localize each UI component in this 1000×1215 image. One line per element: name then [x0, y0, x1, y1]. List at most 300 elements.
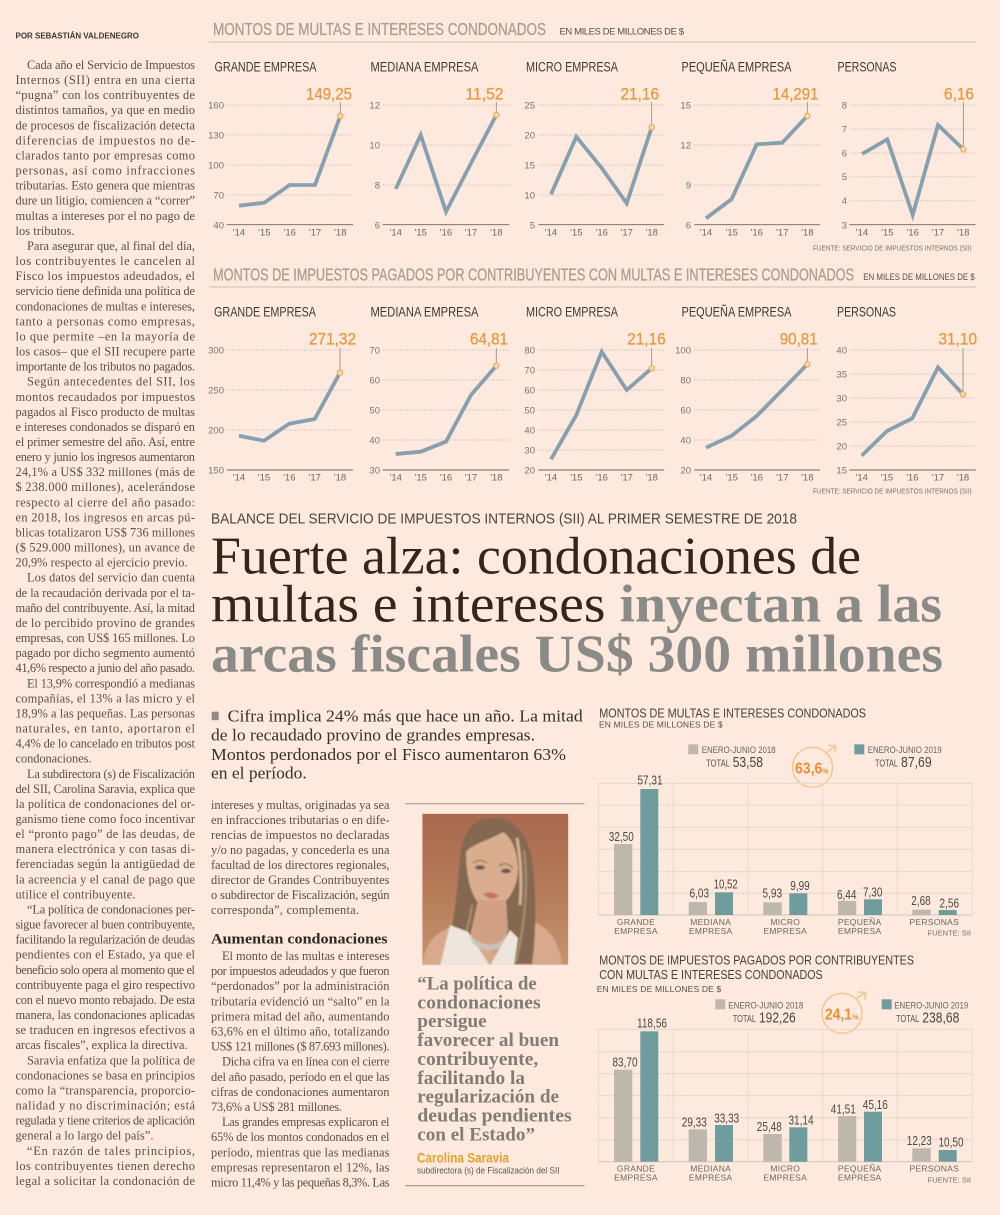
growth badge 24,1%: 24,1: [825, 1006, 852, 1023]
title: [211, 527, 943, 684]
pull quote: favorecer al buen: [417, 1030, 559, 1051]
text block: left article column: diferencias de impuestos no de-: [16, 133, 195, 147]
line chart: multas grande empresa: 40: [213, 220, 224, 232]
line chart: impuestos pequeña empresa: 60: [680, 406, 691, 416]
line chart: multas micro empresa: '16: [596, 228, 608, 238]
pull quote: facilitando la: [417, 1068, 526, 1089]
line chart: multas grande empresa: '16: [284, 228, 296, 238]
group: micro empresa: 25,48: [757, 1120, 782, 1134]
text block: left article column: condonaciones de multas e intereses,: [16, 299, 195, 313]
pull quote: “La política de: [417, 973, 537, 994]
source note: impuestos: FUENTE: SERVICIO DE IMPUESTOS INTERNOS (SII): [813, 486, 972, 495]
line chart: impuestos personas: 25: [836, 418, 847, 428]
group: grande empresa: 83,70: [612, 1055, 638, 1069]
text block: middle column bottom: cifras de condonaciones aumentaron: [211, 1085, 390, 1099]
line chart: multas pequeña empresa: '18: [801, 228, 813, 238]
line chart: impuestos personas: 35: [836, 370, 847, 380]
group: pequeña empresa: PEQUEÑA: [838, 917, 882, 927]
line chart: impuestos micro empresa: '17: [621, 472, 633, 484]
legend 2018: 192,26: [759, 1010, 796, 1026]
text block: middle column bottom: período, mientras que las medianas: [211, 1145, 390, 1159]
line chart: impuestos personas: '18: [957, 472, 969, 484]
group: grande empresa: 57,31: [638, 773, 663, 787]
text block: left article column: condonaciones.: [16, 752, 92, 766]
line chart: multas mediana empresa: [369, 60, 509, 238]
text block: left article column: importante de los tributos no pagados.: [16, 360, 195, 374]
line chart: impuestos grande empresa: 250: [208, 386, 224, 396]
quote attribution: subdirectora (s) de Fiscalización del SII: [417, 1165, 560, 1176]
text block: left article column: “En razón de tales principios,: [27, 1144, 195, 1158]
line chart: multas micro empresa: 10: [524, 190, 535, 202]
group: pequeña empresa: [837, 886, 882, 936]
text block: left article column: [16, 58, 196, 1188]
line chart: impuestos micro empresa: 80: [524, 346, 535, 356]
group: micro empresa: [757, 1113, 814, 1183]
group: personas: PERSONAS: [909, 1164, 959, 1174]
text block: left article column: “La política de condonaciones per-: [27, 902, 195, 916]
legend 2018: ENERO-JUNIO 2018: [702, 745, 776, 756]
group: mediana empresa: EMPRESA: [689, 1173, 733, 1183]
text block: left article column: manera, las condonaciones aplicadas: [16, 1008, 195, 1022]
text block: left article column: enero y junio los ingresos aumentaron: [16, 450, 195, 464]
line chart: multas mediana empresa: 11,52: [466, 84, 504, 104]
text block: middle column top: y/o no pagadas, y concederla es una: [211, 843, 390, 857]
text block: left article column: con el nuevo monto rebajado. De esta: [16, 993, 196, 1007]
legend 2018: ENERO-JUNIO 2018: [728, 1000, 803, 1011]
legend 2019: ENERO-JUNIO 2019: [894, 1000, 968, 1011]
quote attribution: Carolina Saravia: [417, 1150, 509, 1166]
line chart: multas micro empresa: '17: [621, 228, 633, 238]
line chart: impuestos mediana empresa: '14: [390, 472, 402, 484]
line chart: multas micro empresa: '15: [570, 228, 582, 238]
text block: left article column: blicas totalizaron US$ 736 millones: [16, 526, 195, 540]
section heading: montos de multas: MONTOS DE MULTAS E INTERESES CONDONADOS: [213, 19, 546, 39]
text block: middle column bottom: del año pasado, período en el que las: [211, 1070, 390, 1084]
group: pequeña empresa: EMPRESA: [838, 1173, 882, 1183]
text block: left article column: $ 238.000 millones), acelerándose: [16, 480, 196, 494]
deck summary: Montos perdonados por el Fisco aumentaron 63%: [211, 745, 566, 764]
line chart: impuestos personas: [836, 305, 977, 484]
text block: middle column top: director de Grandes Contribuyentes: [211, 873, 390, 887]
text block: left article column: pagado por dicho segmento aumentó: [16, 646, 195, 660]
text block: middle column bottom: tributaria evidenció un “salto” en la: [211, 994, 390, 1008]
line chart: impuestos grande empresa: [208, 305, 356, 484]
line chart: multas mediana empresa: '17: [465, 228, 477, 238]
text block: left article column: respecto al cierre del año pasado:: [16, 495, 195, 509]
deck summary: de lo recaudado provino de grandes empresas.: [211, 726, 535, 745]
line chart: impuestos mediana empresa: '18: [490, 472, 502, 484]
line chart: impuestos micro empresa: 50: [524, 406, 535, 416]
text block: left article column: se traducen en ingresos efectivos a: [16, 1023, 196, 1037]
growth badge 63,6%: 63,6: [795, 760, 822, 777]
line chart: impuestos personas: '16: [906, 472, 918, 484]
text block: left article column: utilice el contribuyente.: [16, 887, 136, 901]
text block: middle column bottom: primera mitad del año, aumentando: [211, 1009, 390, 1023]
line chart: multas pequeña empresa: '15: [726, 228, 738, 238]
line chart: impuestos pequeña empresa: 90,81: [780, 330, 818, 349]
text block: left article column: Según antecedentes del SII, los: [27, 375, 195, 389]
text block: left article column: de la recaudación derivada por el ta-: [16, 586, 195, 600]
group: mediana empresa: MEDIANA: [690, 917, 731, 927]
text block: left article column: lo que permite –en la mayoría de: [16, 329, 196, 343]
text block: left article column: condonaciones se basa en principios: [16, 1068, 195, 1082]
text block: left article column: distintos tamaños, ya que en medio: [16, 103, 195, 117]
chart heading: [599, 707, 866, 730]
title: arcas fiscales US$ 300 millones: [211, 626, 943, 684]
text block: left article column: los tributos.: [16, 224, 74, 238]
text block: left article column: como la “transparencia, proporcio-: [16, 1083, 195, 1097]
line chart: impuestos pequeña empresa: '16: [751, 472, 763, 484]
line chart: impuestos grande empresa: '18: [334, 472, 346, 484]
chart heading: [597, 953, 914, 994]
line chart: multas micro empresa: 15: [524, 160, 535, 172]
line chart: impuestos mediana empresa: 40: [369, 436, 380, 446]
legend 2019: [882, 999, 968, 1026]
legend 2019: 238,68: [922, 1010, 959, 1026]
group: mediana empresa: 33,33: [714, 1111, 739, 1125]
text block: middle column bottom: micro 11,4% y las pequeñas 8,3%. Las: [211, 1176, 390, 1190]
line chart: impuestos mediana empresa: '16: [440, 472, 452, 484]
text block: left article column: 41,6% respecto a junio del año pasado.: [16, 661, 195, 675]
line chart: impuestos micro empresa: '18: [646, 472, 658, 484]
group: grande empresa: 32,50: [609, 830, 634, 844]
line chart: multas micro empresa: MICRO EMPRESA: [526, 60, 618, 75]
line chart: multas personas: 3: [842, 220, 847, 232]
line chart: multas personas: 5: [842, 172, 847, 183]
text block: left article column: personas, así como infracciones: [16, 164, 195, 178]
line chart: impuestos personas: 20: [836, 442, 847, 452]
line chart: multas personas: 6: [842, 148, 847, 160]
text block: left article column: nalidad y no discriminación; está: [16, 1098, 196, 1112]
group: pequeña empresa: EMPRESA: [838, 926, 882, 936]
line chart: multas personas: '18: [957, 228, 969, 238]
line chart: multas micro empresa: '14: [545, 228, 557, 238]
line chart: impuestos grande empresa: 271,32: [309, 330, 356, 349]
text block: middle column top: corresponda”, complementa.: [211, 903, 359, 917]
line chart: impuestos mediana empresa: [369, 305, 509, 484]
line chart: multas grande empresa: 130: [208, 130, 224, 142]
text block: left article column: “pugna” con los contribuyentes de: [16, 88, 196, 102]
chart heading: MONTOS DE MULTAS E INTERESES CONDONADOS: [599, 707, 866, 721]
line chart: multas mediana empresa: 8: [375, 180, 380, 192]
growth badge 63,6%: [792, 746, 836, 787]
line chart: impuestos micro empresa: 60: [524, 386, 535, 396]
line chart: multas personas: '15: [881, 228, 893, 238]
pull quote: contribuyente,: [417, 1049, 539, 1070]
text block: middle column bottom: El monto de las multas e intereses: [222, 949, 390, 963]
group: pequeña empresa: [831, 1098, 888, 1183]
text block: left article column: de procesos de fiscalización detecta: [16, 118, 196, 132]
line chart: impuestos micro empresa: 70: [524, 366, 535, 376]
group: personas: 2,56: [940, 896, 959, 910]
text block: left article column: pagados al Fisco producto de multas: [16, 405, 195, 419]
line chart: impuestos grande empresa: '14: [233, 472, 245, 484]
text block: left article column: beneficio solo opera al momento que el: [16, 963, 196, 977]
group: micro empresa: EMPRESA: [763, 1173, 807, 1183]
text block: left article column: Internos (SII) entra en una cierta: [16, 73, 196, 87]
text block: left article column: los contribuyentes le cancelen al: [16, 254, 196, 268]
legend 2018: 53,58: [733, 755, 763, 771]
line chart: impuestos grande empresa: 200: [208, 426, 224, 436]
text block: left article column: multas a intereses por el no pago de: [16, 209, 196, 223]
line chart: multas personas: 4: [842, 196, 847, 207]
legend 2018: [688, 744, 776, 771]
text block: left article column: 20,9% respecto al ejercicio previo.: [16, 556, 188, 570]
line chart: impuestos grande empresa: '17: [309, 472, 321, 484]
line chart: multas grande empresa: '14: [233, 228, 245, 238]
text block: left article column: pendientes con el Estado, ya que el: [16, 948, 196, 962]
line chart: multas grande empresa: '15: [258, 228, 270, 238]
chart heading: EN MILES DE MILLONES DE $: [597, 984, 722, 994]
title: Fuerte alza: condonaciones de: [211, 527, 861, 585]
text block: middle column bottom: 63,6% en el último año, totalizando: [211, 1024, 390, 1038]
line chart: impuestos mediana empresa: 50: [369, 406, 380, 416]
group: grande empresa: [609, 773, 663, 936]
text block: left article column: contribuyente paga el giro respectivo: [16, 978, 195, 992]
line chart: multas grande empresa: '17: [309, 228, 321, 238]
line chart: multas mediana empresa: '14: [390, 228, 402, 238]
quote attribution: [417, 1150, 560, 1176]
group: grande empresa: 118,56: [637, 1017, 667, 1031]
text block: left article column: tributarias. Esto genera que mientras: [16, 179, 195, 193]
line chart: multas micro empresa: 25: [524, 100, 535, 112]
text block: left article column: La subdirectora (s) de Fiscalización: [27, 767, 195, 781]
text block: middle column top: rencias de impuestos no declaradas: [211, 828, 390, 842]
line chart: impuestos micro empresa: '16: [596, 472, 608, 484]
deck summary: en el período.: [211, 763, 307, 782]
line chart: multas micro empresa: [524, 60, 664, 238]
group: personas: [907, 1134, 964, 1174]
line chart: multas pequeña empresa: 6: [686, 220, 691, 232]
group: mediana empresa: [689, 877, 738, 936]
group: grande empresa: EMPRESA: [614, 926, 658, 936]
line chart: impuestos micro empresa: 20: [524, 466, 535, 476]
text block: left article column: general a lo largo del país”.: [16, 1129, 154, 1143]
text block: middle column bottom: 65% de los montos condonados en el: [211, 1130, 390, 1144]
source note: FUENTE: SII: [928, 1175, 971, 1184]
deck summary: [211, 707, 583, 782]
line chart: multas personas: 7: [842, 124, 847, 136]
group: personas: [909, 894, 959, 927]
text block: middle column bottom: por impuestos adeudados y que fueron: [211, 964, 390, 978]
line chart: multas personas: '16: [907, 228, 919, 238]
text block: left article column: manera electrónica y con tasas di-: [16, 842, 195, 856]
line chart: impuestos pequeña empresa: 20: [680, 466, 691, 476]
text block: middle column top: [211, 798, 390, 917]
line chart: impuestos grande empresa: '16: [283, 472, 295, 484]
line chart: impuestos micro empresa: MICRO EMPRESA: [526, 305, 618, 320]
line chart: multas pequeña empresa: '17: [776, 228, 788, 238]
text block: left article column: ganismo tiene como foco incentivar: [16, 812, 196, 826]
line chart: impuestos mediana empresa: '15: [415, 472, 427, 484]
text block: left article column: Para asegurar que, al final del día,: [27, 239, 195, 253]
text block: left article column: del SII, Carolina Saravia, explica que: [16, 782, 196, 796]
line chart: multas personas: PERSONAS: [838, 60, 896, 75]
section heading: montos de multas: EN MILES DE MILLONES DE $: [560, 27, 685, 38]
text block: middle column top: intereses y multas, originadas ya sea: [211, 798, 390, 812]
pull quote: [417, 973, 572, 1146]
title: inyectan a las: [620, 576, 942, 634]
line chart: impuestos pequeña empresa: '17: [776, 472, 788, 484]
line chart: impuestos pequeña empresa: '14: [700, 472, 712, 484]
group: personas: 12,23: [907, 1134, 932, 1148]
group: micro empresa: MICRO: [770, 1164, 800, 1174]
section heading: montos de multas: [209, 19, 976, 42]
line chart: impuestos personas: '15: [881, 472, 893, 484]
line chart: multas pequeña empresa: PEQUEÑA EMPRESA: [682, 60, 792, 75]
text block: left article column: dure un litigio, comiencen a “correr”: [16, 194, 195, 208]
legend 2019: ENERO-JUNIO 2019: [868, 745, 942, 756]
text block: left article column: e intereses condonados se disparó en: [16, 420, 195, 434]
group: pequeña empresa: 41,51: [831, 1102, 856, 1116]
text block: left article column: servicio tiene definida una política de: [16, 284, 196, 298]
line chart: multas micro empresa: 5: [530, 220, 535, 232]
pull quote: condonaciones: [417, 992, 541, 1013]
photo: Carolina Saravia: [422, 814, 568, 966]
byline: POR SEBASTIÁN VALDENEGRO: [16, 31, 139, 40]
group: personas: 2,68: [911, 894, 931, 908]
pull quote: persigue: [417, 1011, 487, 1032]
text block: left article column: clarados tanto por empresas como: [16, 148, 195, 162]
line chart: multas pequeña empresa: 15: [680, 100, 691, 112]
legend 2019: TOTAL: [875, 759, 898, 770]
line chart: multas grande empresa: 100: [208, 160, 224, 172]
line chart: multas mediana empresa: 6: [375, 220, 380, 232]
text block: left article column: empresas, con US$ 165 millones. Lo: [16, 631, 195, 645]
line chart: multas personas: 8: [842, 100, 847, 112]
text block: left article column: naturales, en tanto, aportaron el: [16, 722, 196, 736]
text block: left article column: los casos– que el SII recupere parte: [16, 344, 196, 358]
chart heading: EN MILES DE MILLONES DE $: [599, 720, 723, 730]
line chart: multas mediana empresa: 12: [369, 100, 380, 112]
group: micro empresa: [763, 879, 810, 936]
text block: middle column bottom: Dicha cifra va en línea con el cierre: [222, 1055, 390, 1069]
pull quote: con el Estado”: [417, 1125, 535, 1146]
group: pequeña empresa: 7,30: [863, 886, 882, 900]
growth badge 24,1%: %: [852, 1014, 860, 1021]
line chart: impuestos micro empresa: 40: [524, 426, 535, 436]
group: mediana empresa: [682, 1111, 739, 1183]
text block: middle column top: en infracciones tributarias o en dife-: [211, 813, 390, 827]
line chart: impuestos pequeña empresa: 100: [675, 346, 691, 356]
line chart: multas mediana empresa: '16: [440, 228, 452, 238]
line chart: multas grande empresa: '18: [334, 228, 346, 238]
line chart: impuestos personas: 40: [836, 346, 847, 356]
line chart: multas mediana empresa: '15: [415, 228, 427, 238]
line chart: impuestos micro empresa: '14: [545, 472, 557, 484]
legend 2019: 87,69: [901, 755, 932, 771]
text block: left article column: compañías, el 13% a las micro y el: [16, 691, 196, 705]
line chart: impuestos mediana empresa: MEDIANA EMPRESA: [370, 305, 478, 320]
group: mediana empresa: 29,33: [682, 1116, 707, 1130]
text block: middle column top: o subdirector de Fiscalización, según: [211, 888, 390, 902]
line chart: multas grande empresa: [208, 60, 353, 238]
line chart: multas personas: '14: [856, 228, 868, 238]
text block: left article column: ($ 529.000 millones), un avance de: [16, 541, 196, 555]
pull quote: deudas pendientes: [417, 1106, 572, 1127]
text block: left article column: el primer semestre del año. Así, entre: [16, 435, 196, 449]
subheading: aumentan condonaciones: Aumentan condonaciones: [211, 932, 388, 948]
line chart: multas pequeña empresa: '14: [700, 228, 712, 238]
text block: left article column: ferenciadas según la antigüedad de: [16, 857, 196, 871]
group: mediana empresa: 10,52: [714, 877, 738, 891]
line chart: multas grande empresa: 70: [213, 190, 224, 202]
text block: middle column bottom: 73,6% a US$ 281 millones.: [211, 1100, 342, 1114]
line chart: impuestos personas: 30: [836, 394, 847, 404]
line chart: multas pequeña empresa: 14,291: [772, 84, 818, 104]
line chart: impuestos micro empresa: [524, 305, 666, 484]
line chart: multas pequeña empresa: 9: [686, 180, 691, 192]
line chart: impuestos personas: 15: [836, 466, 847, 476]
group: pequeña empresa: 45,16: [863, 1098, 888, 1112]
line chart: multas micro empresa: 20: [524, 130, 535, 142]
line chart: multas personas: [838, 60, 976, 238]
text block: left article column: 24,1% a US$ 332 millones (más de: [16, 465, 196, 479]
text block: left article column: Fisco los impuestos adeudados, el: [16, 269, 196, 283]
pull quote: regularización de: [417, 1087, 559, 1108]
line chart: impuestos pequeña empresa: 80: [680, 376, 691, 386]
line chart: impuestos grande empresa: 150: [208, 466, 224, 476]
text block: left article column: sigue favorecer al buen contribuyente,: [16, 918, 195, 932]
text block: left article column: Los datos del servicio dan cuenta: [27, 571, 196, 585]
text block: left article column: el “pronto pago” de las deudas, de: [16, 827, 196, 841]
line chart: multas micro empresa: '18: [646, 228, 658, 238]
line chart: impuestos grande empresa: '15: [258, 472, 270, 484]
group: grande empresa: [612, 1017, 667, 1183]
legend 2019: TOTAL: [896, 1014, 920, 1025]
group: mediana empresa: 6,03: [690, 887, 709, 901]
group: pequeña empresa: 6,44: [837, 888, 856, 902]
deck summary: Cifra implica 24% más que hace un año. La mitad: [228, 707, 583, 726]
text block: left article column: la acreencia y el canal de pago que: [16, 872, 196, 886]
line chart: impuestos mediana empresa: 60: [369, 376, 380, 386]
text block: middle column bottom: empresas representaron el 12%, las: [211, 1160, 390, 1174]
line chart: multas pequeña empresa: 12: [680, 140, 691, 152]
text block: left article column: tanto a personas como empresas,: [16, 314, 195, 328]
text block: middle column bottom: Las grandes empresas explicaron el: [222, 1115, 390, 1129]
text block: left article column: los contribuyentes tienen derecho: [16, 1159, 195, 1173]
line chart: impuestos pequeña empresa: [675, 305, 820, 484]
section heading: montos de impuestos pagados: EN MILES DE MILLONES DE $: [863, 272, 975, 283]
group: grande empresa: GRANDE: [617, 1164, 655, 1174]
group: micro empresa: 31,14: [788, 1113, 814, 1127]
source note: FUENTE: SII: [928, 929, 971, 938]
line chart: impuestos pequeña empresa: 40: [680, 436, 691, 446]
group: micro empresa: MICRO: [770, 917, 800, 927]
text block: left article column: regulada y tiene criterios de aplicación: [16, 1114, 195, 1128]
group: personas: 10,50: [938, 1136, 964, 1150]
text block: left article column: maño del contribuyente. Así, la mitad: [16, 601, 196, 615]
chart heading: CON MULTAS E INTERESES CONDONADOS: [599, 968, 823, 982]
group: grande empresa: EMPRESA: [614, 1173, 658, 1183]
text block: left article column: arcas fiscales”, explica la directiva.: [16, 1038, 188, 1052]
text block: left article column: de lo percibido provino de grandes: [16, 616, 195, 630]
text block: middle column bottom: “perdonados” por la administración: [211, 979, 390, 993]
text block: left article column: legal a solicitar la condonación de: [16, 1174, 196, 1188]
line chart: multas pequeña empresa: [680, 60, 820, 238]
line chart: multas mediana empresa: '18: [490, 228, 502, 238]
kicker: BALANCE DEL SERVICIO DE IMPUESTOS INTERNOS (SII) AL PRIMER SEMESTRE DE 2018: [211, 510, 797, 528]
group: micro empresa: EMPRESA: [763, 926, 807, 936]
text block: left article column: la política de condonaciones del or-: [16, 797, 195, 811]
line chart: impuestos personas: '17: [932, 472, 944, 484]
line chart: multas mediana empresa: MEDIANA EMPRESA: [370, 60, 478, 75]
line chart: impuestos grande empresa: 300: [208, 346, 224, 356]
line chart: multas personas: '17: [932, 228, 944, 238]
legend 2018: [715, 999, 803, 1026]
line chart: impuestos mediana empresa: 70: [369, 346, 380, 356]
text block: left article column: Cada año el Servicio de Impuestos: [27, 58, 195, 72]
